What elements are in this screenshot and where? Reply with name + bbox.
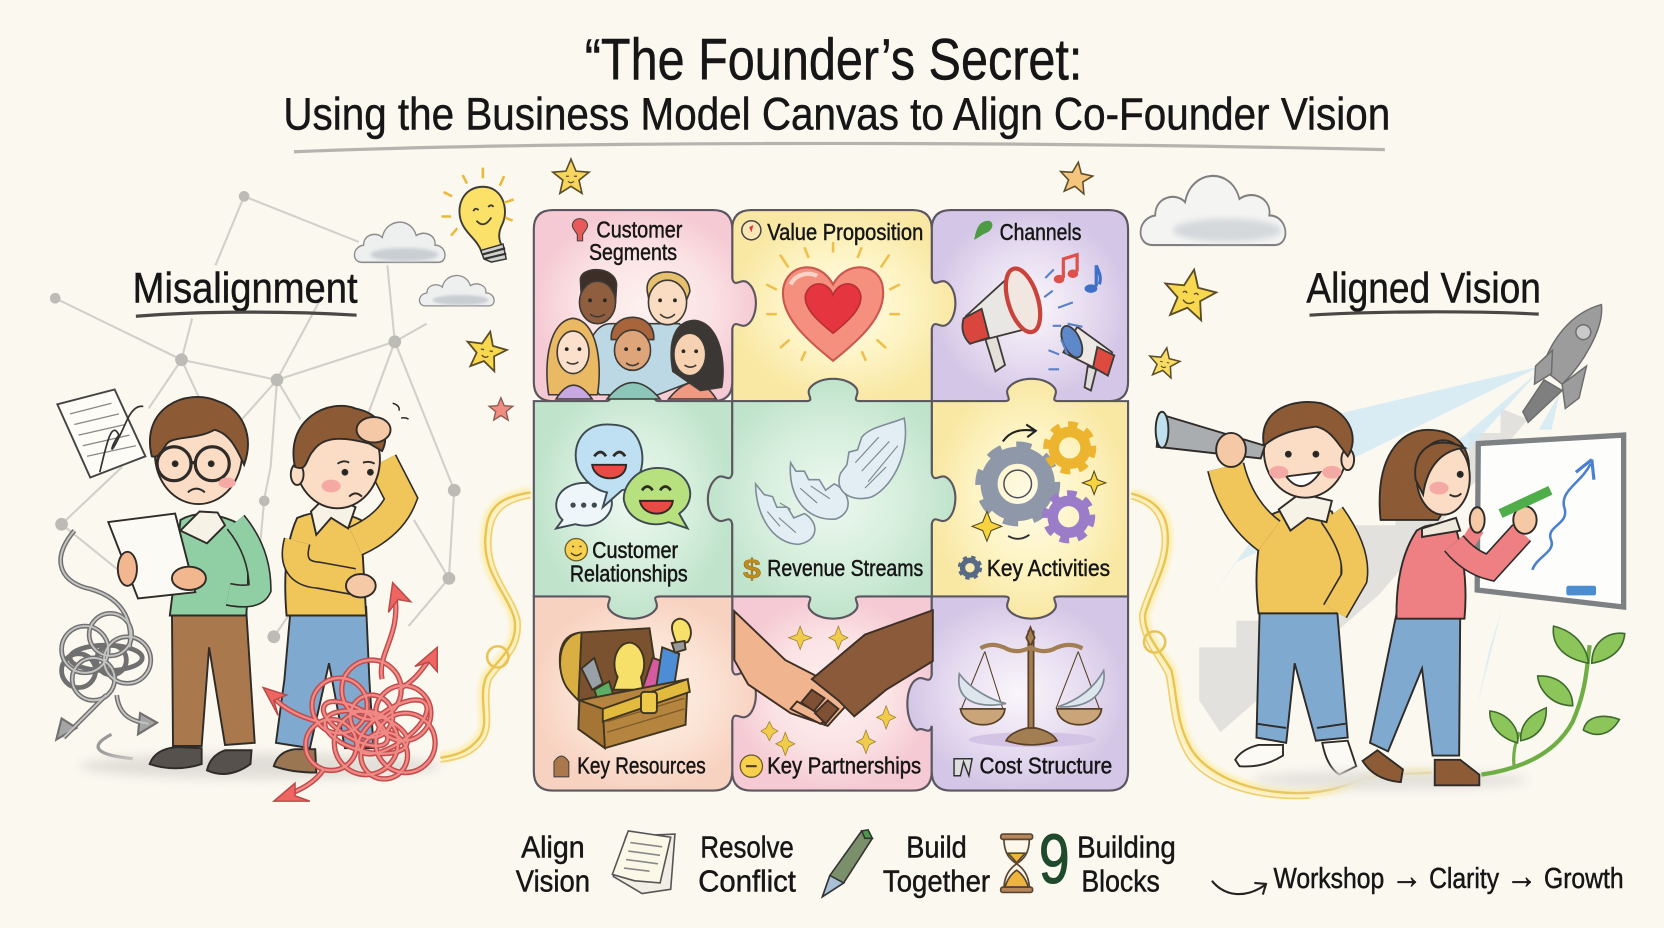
label: Key Partnerships: Key Partnerships (767, 753, 921, 779)
arrow: curved swoosh (1212, 881, 1266, 895)
footer label: Align Vision: Align (521, 829, 585, 864)
label: Customer Relationships: Customer (592, 537, 678, 563)
footer label: Resolve Conflict: Conflict (698, 863, 796, 898)
connector rope left (440, 492, 531, 762)
heading: Misalignment: Misalignment (133, 264, 358, 311)
footer label: workshop flow: Workshop → Clarity → Growth (1273, 855, 1624, 896)
illustration: handshake (734, 610, 933, 726)
icon: star right small (1147, 345, 1182, 379)
illustration: customer group (547, 270, 723, 399)
illustration: megaphones and notes (962, 255, 1114, 391)
footer label: Align Vision (516, 829, 590, 898)
footer number: 9: 9 (1039, 820, 1070, 898)
footer label: Building Blocks: Blocks (1081, 863, 1160, 898)
label: Key Activities: Key Activities (987, 555, 1110, 581)
label: Customer Relationships: Relationships (570, 561, 688, 587)
footer label: Building Blocks: Building (1077, 829, 1176, 864)
character: founder with telescope (1156, 402, 1356, 775)
connector rope right (1131, 493, 1432, 798)
label: Customer Segments: Customer (596, 217, 683, 243)
icon: hourglass (1001, 834, 1033, 892)
footer label: Align Vision: Vision (516, 863, 590, 898)
icon: light bulb (441, 168, 514, 262)
label: Channels (974, 219, 1081, 245)
label: Customer Relationships (565, 537, 688, 587)
character: founder at whiteboard (1363, 430, 1550, 785)
title: Using the Business Model Canvas to Align Co-Founder Vision (283, 88, 1390, 139)
label: Channels: Channels (1000, 219, 1081, 245)
icon: star red (489, 398, 513, 420)
label: Key Resources: Key Resources (577, 753, 706, 779)
illustration: heart (766, 242, 900, 361)
title: “The Founder’s Secret: (585, 28, 1082, 93)
illustration: gears (972, 424, 1106, 541)
illustration: balance scale (959, 627, 1104, 747)
icon: pen (822, 830, 872, 897)
shadow: right characters (1252, 770, 1528, 790)
footer label: Building Blocks (1077, 829, 1176, 898)
panel: channels (932, 210, 1128, 401)
title (283, 28, 1390, 152)
icon: whiteboard (1477, 435, 1624, 607)
label: Revenue Streams: $ (743, 553, 761, 584)
character: founder in green with glasses (108, 397, 260, 774)
network background: misalignment web (50, 191, 461, 643)
icon: rocket (1523, 305, 1602, 422)
label: Value Proposition: Value Proposition (767, 219, 923, 245)
panel: key resources (534, 596, 756, 791)
icon: cloud right (1141, 176, 1285, 245)
icon: star orange top (1058, 160, 1094, 195)
heading: Aligned Vision: Aligned Vision (1306, 264, 1541, 311)
shadow: left characters (80, 753, 440, 779)
icon: tangled red knot (263, 583, 437, 801)
panel: cost structure (907, 596, 1128, 791)
icon: cloud top left (354, 222, 445, 262)
scene: staircase (1199, 409, 1528, 732)
label: Customer Segments: Segments (589, 239, 677, 265)
footer label: Resolve Conflict (698, 829, 796, 898)
panel: key partnerships (732, 596, 932, 791)
label: Revenue Streams: Revenue Streams (767, 555, 923, 581)
illustration: winged revenue (756, 418, 906, 544)
panel: key activities (932, 379, 1128, 619)
icon: growing plant (1481, 626, 1625, 775)
label: Revenue Streams (743, 553, 923, 584)
icon: notepad (612, 831, 675, 894)
panel: customer segments (534, 210, 756, 401)
footer label: Build Together (883, 829, 990, 898)
icon: star right large (1160, 265, 1219, 322)
label: Cost Structure: Cost Structure (980, 753, 1112, 779)
panel: customer relationships (534, 379, 732, 619)
icon: cloud small (419, 276, 494, 306)
decoration: handshake sparkles (761, 626, 896, 756)
illustration: speech bubbles (556, 424, 690, 528)
panel: value proposition (732, 210, 955, 401)
label: Customer Segments (572, 217, 683, 265)
footer label: Build Together: Build (906, 829, 967, 864)
illustration: treasure chest (560, 619, 691, 748)
icon: scribbled paper (57, 389, 145, 478)
footer label: Resolve Conflict: Resolve (700, 829, 794, 864)
footer label: Build Together: Together (883, 863, 990, 898)
character: founder in yellow scratching head (274, 403, 409, 773)
icon: tangled gray rope (56, 531, 157, 759)
panel: business model canvas puzzle (534, 210, 1128, 791)
panel: revenue streams (708, 379, 955, 619)
icon: star smiling top (553, 159, 589, 193)
scene: light rays (1204, 366, 1560, 706)
icon: star left (463, 327, 510, 373)
